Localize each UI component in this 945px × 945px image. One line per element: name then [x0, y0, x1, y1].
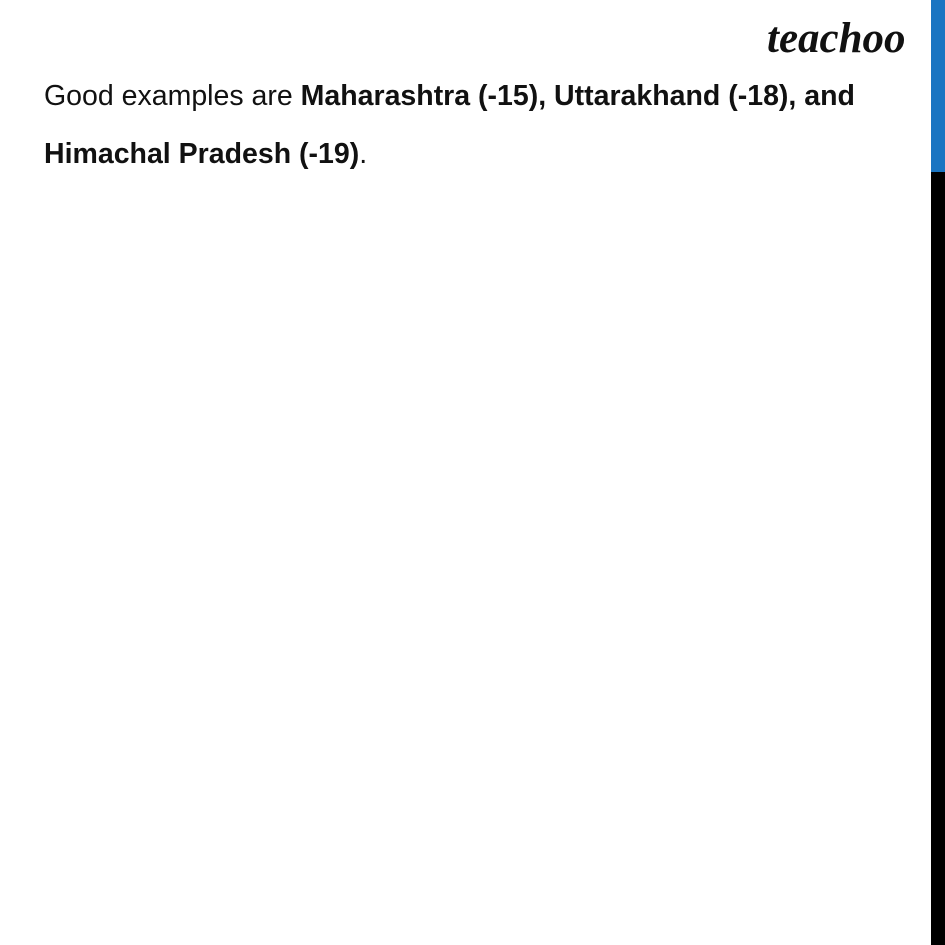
- side bar: blue: [931, 0, 945, 172]
- side bar: black: [931, 172, 945, 945]
- text line 2: Himachal Pradesh (-19).: [44, 138, 367, 170]
- text line 1: Good examples are Maharashtra (-15), Uttarakhand (-18), and: [44, 80, 855, 112]
- logo: teachoo: teachoo: [767, 15, 906, 62]
